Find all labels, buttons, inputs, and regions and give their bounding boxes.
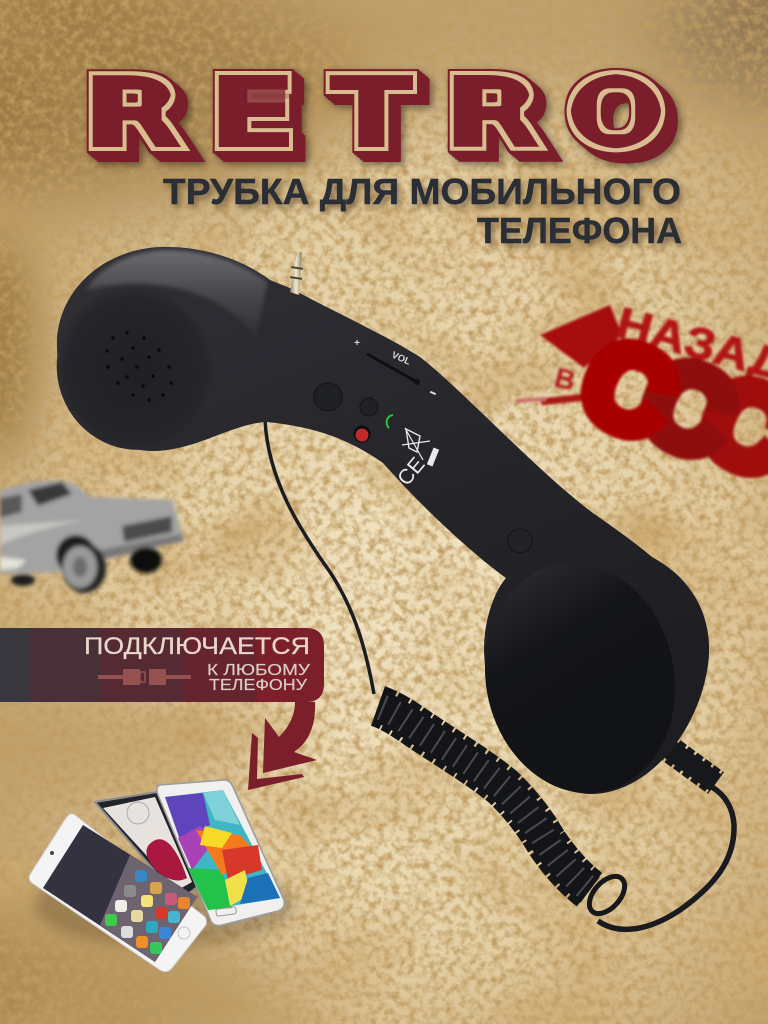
volume control: VOL — [390, 350, 412, 368]
app icons — [105, 870, 190, 954]
callout subtext: ТЕЛЕФОНУ — [209, 677, 307, 694]
illustration: grey retro car — [0, 480, 184, 593]
phone: white iPhone — [29, 814, 206, 972]
mouthpiece cup — [464, 545, 696, 811]
subtitle — [163, 171, 682, 251]
earpiece cup — [38, 269, 232, 467]
stamp: back to the USSR: С — [621, 331, 753, 486]
phone: Samsung — [157, 780, 284, 926]
stamp: back to the USSR: С — [562, 312, 694, 467]
thin cord to jack side — [265, 420, 374, 694]
title: RETRO: R — [445, 57, 542, 170]
subtitle: ТРУБКА ДЛЯ МОБИЛЬНОГО — [163, 171, 681, 212]
callout heading: ПОДКЛЮЧАЕТСЯ — [84, 633, 310, 660]
icon: plug and socket — [98, 669, 191, 685]
title: RETRO: E — [210, 57, 296, 170]
title: RETRO: O — [566, 58, 665, 170]
volume control: + — [354, 338, 360, 349]
green call icon — [387, 415, 393, 428]
callout subtext — [207, 662, 310, 694]
title: RETRO: R — [84, 58, 184, 170]
callout banner: connects to any phone — [0, 628, 324, 702]
audio jack — [290, 252, 303, 295]
side buttons — [314, 383, 378, 416]
stamp: back to the USSR — [516, 298, 768, 504]
phone: back black phone — [95, 792, 200, 900]
regulatory marks: CE — [393, 453, 430, 490]
earpiece top cap highlight — [86, 250, 267, 335]
volume control — [354, 338, 436, 395]
title: RETRO: T — [331, 57, 412, 170]
stamp: back to the USSR: В — [552, 362, 579, 397]
handle button — [508, 529, 532, 553]
callout subtext: К ЛЮБОМУ — [207, 662, 310, 679]
illustration: three smartphones — [29, 780, 295, 972]
coiled cord — [378, 706, 734, 929]
subtitle: ТЕЛЕФОНА — [477, 210, 682, 251]
strain relief — [664, 745, 716, 783]
title: RETRO — [84, 57, 665, 170]
red led button — [354, 426, 370, 442]
earpiece holes — [105, 331, 173, 402]
arrow: pointing to phones — [248, 702, 317, 790]
regulatory marks — [393, 428, 439, 490]
handset: black retro receiver — [38, 247, 709, 811]
